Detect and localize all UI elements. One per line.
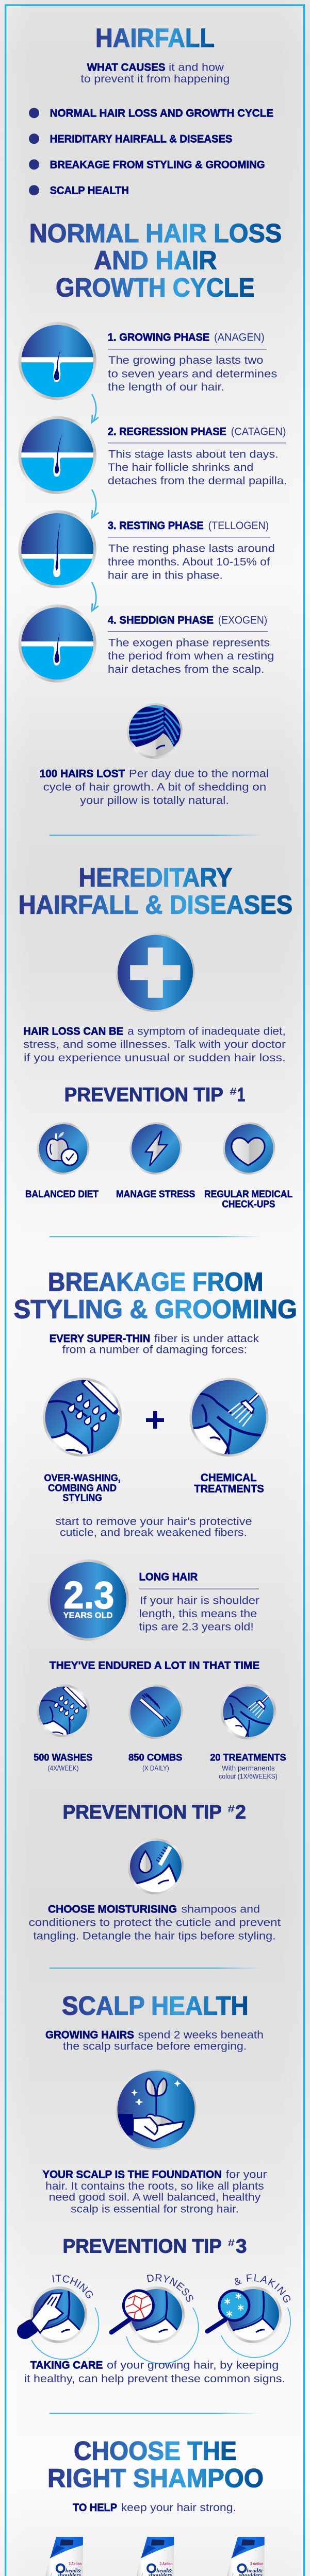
text: taking care xyxy=(24,2360,285,2385)
text: every super-thin xyxy=(50,1333,259,1356)
labels: damage causes: STYLING xyxy=(63,1493,102,1503)
heading: normal hair loss: AND HAIR xyxy=(94,246,217,275)
text: regression phase: 2. REGRESSION PHASE xyxy=(108,426,226,437)
text: long hair: tips are 2.3 years old! xyxy=(139,1621,254,1633)
text: regression phase: This stage lasts about ten days. xyxy=(108,448,279,460)
icon: dryness: DRYNESS xyxy=(146,2274,193,2302)
labels: endured: 20 TREATMENTS xyxy=(210,1752,286,1763)
text: shedding phase: the period from when a resting xyxy=(108,650,274,662)
icon labels: tip 1: CHECK-UPS xyxy=(222,1199,275,1210)
labels: endured xyxy=(34,1752,286,1781)
heading: prevention tip 3: 3 xyxy=(236,2235,247,2257)
text: choose moisturising: conditioners to protect the cuticle and prevent xyxy=(29,1917,281,1928)
text: your scalp: need good soil. A well balanced, healthy xyxy=(49,2192,261,2204)
icon: medical cross xyxy=(116,933,195,1012)
contents list xyxy=(29,108,273,197)
text: resting phase: three months. About 10-15% of xyxy=(108,556,270,568)
text: choose moisturising xyxy=(29,1903,281,1942)
text: your scalp: scalp is essential for strong hair. xyxy=(71,2203,239,2215)
labels: damage causes xyxy=(44,1472,264,1503)
text: choose moisturising: CHOOSE MOISTURISING xyxy=(48,1903,177,1915)
text: start to remove: start to remove your hair's protective xyxy=(55,1516,252,1528)
text: hair loss can be: HAIR LOSS CAN BE xyxy=(23,1025,123,1037)
text: choose moisturising: tangling. Detangle the hair tips before styling. xyxy=(33,1930,276,1942)
text: start to remove xyxy=(55,1516,252,1539)
icon: itching: ITCHING xyxy=(52,2275,93,2299)
text: hair loss can be: if you experience unusual or sudden hair loss. xyxy=(24,1052,286,1064)
text: choose moisturising: shampoos and xyxy=(182,1903,260,1915)
text: every super-thin: EVERY SUPER-THIN xyxy=(50,1333,150,1345)
subtitle: to prevent it from happening xyxy=(80,73,230,85)
text: 100 hairs lost: your pillow is totally natural. xyxy=(80,795,229,807)
heading: scalp health: SCALP HEALTH xyxy=(62,1991,249,2021)
text: hair loss can be xyxy=(23,1025,286,1064)
text: growing phase: (ANAGEN) xyxy=(214,332,265,344)
text: every super-thin: from a number of damaging forces: xyxy=(62,1344,247,1356)
title: HAIRFALL xyxy=(95,23,215,53)
bottle: itchy scalp care xyxy=(44,2537,83,2576)
text: regression phase xyxy=(108,426,287,487)
heading: prevention tip 2: PREVENTION TIP xyxy=(63,1802,222,1823)
heading: breakage xyxy=(14,1267,297,1324)
icon: shedding phase follicle xyxy=(19,604,96,683)
text: growing phase: 1. GROWING PHASE xyxy=(108,332,209,344)
icon: comb xyxy=(128,1685,183,1739)
bottle: itchy scalp care: head& xyxy=(66,2568,81,2574)
labels: damage causes: CHEMICAL xyxy=(201,1472,257,1484)
icon: 20 treatments xyxy=(218,1684,276,1742)
icon: balanced diet apple xyxy=(37,1122,89,1175)
heading: breakage: BREAKAGE FROM xyxy=(48,1267,264,1297)
heading: endured: THEY'VE ENDURED A LOT IN THAT TIME xyxy=(50,1659,259,1671)
icon labels: tip 1: MANAGE STRESS xyxy=(116,1189,195,1200)
heading: hereditary: HEREDITARY xyxy=(78,863,232,892)
icon: chemical treatments xyxy=(184,1378,269,1462)
icon: regression phase follicle xyxy=(19,416,96,494)
bottle: classic clean: head& xyxy=(156,2568,172,2574)
heading: choose the right shampoo: RIGHT SHAMPOO xyxy=(47,2463,264,2493)
icon: plant in hand xyxy=(115,2069,197,2150)
text: growing phase: the length of our hair. xyxy=(108,381,224,393)
text: to help xyxy=(73,2502,236,2514)
bottle: dry scalp care: head& xyxy=(247,2568,263,2574)
contents list: SCALP HEALTH xyxy=(50,185,129,197)
icon labels: tip 1 xyxy=(25,1189,293,1210)
text: your scalp: for your xyxy=(226,2168,267,2180)
text: growing phase: The growing phase lasts two xyxy=(108,354,263,366)
bottle: classic clean: 3 Action xyxy=(160,2562,173,2566)
text: resting phase: The resting phase lasts around xyxy=(108,543,275,555)
arrow xyxy=(92,394,99,422)
labels: damage causes: TREATMENTS xyxy=(194,1483,264,1495)
labels: endured: 850 COMBS xyxy=(128,1752,182,1763)
icon: itching xyxy=(17,2275,99,2360)
icon: moisturising drop and comb xyxy=(128,1838,184,1895)
text: taking care: TAKING CARE xyxy=(30,2360,103,2371)
text: resting phase: (TELLOGEN) xyxy=(208,520,269,532)
text: growing hairs: the scalp surface before emerging. xyxy=(63,2040,247,2052)
icon: manage stress bolt xyxy=(129,1122,182,1175)
bottle: classic clean xyxy=(136,2537,174,2576)
text: to help: keep your hair strong. xyxy=(121,2502,236,2514)
icon: plus sign xyxy=(146,1411,164,1429)
icon: growing phase follicle xyxy=(19,322,96,400)
text: regression phase: detaches from the dermal papilla. xyxy=(108,475,287,487)
heading: normal hair loss xyxy=(29,218,282,302)
heading: prevention tip 1: PREVENTION TIP xyxy=(64,1084,223,1106)
text: your scalp: YOUR SCALP IS THE FOUNDATION xyxy=(42,2168,222,2180)
text: resting phase: hair are in this phase. xyxy=(108,569,223,581)
icon: hair head xyxy=(127,703,183,759)
text: regression phase: (CATAGEN) xyxy=(231,426,286,437)
labels: endured: (4X/WEEK) xyxy=(48,1764,78,1772)
icon: 500 washes xyxy=(34,1682,92,1740)
contents list: BREAKAGE FROM STYLING & GROOMING xyxy=(50,159,265,171)
text: to help: TO HELP xyxy=(73,2502,117,2514)
icon labels: tip 1: BALANCED DIET xyxy=(25,1189,99,1200)
heading: prevention tip 3: # xyxy=(228,2238,235,2249)
text: growing hairs: GROWING HAIRS xyxy=(45,2029,134,2041)
text: growing hairs: spend 2 weeks beneath xyxy=(138,2029,264,2041)
text: growing phase: to seven years and determines xyxy=(108,368,277,380)
text: growing phase xyxy=(108,332,277,393)
icon: flaking: & FLAKING xyxy=(235,2274,291,2303)
bottle: dry scalp care xyxy=(226,2537,265,2576)
text: 100 hairs lost: Per day due to the normal xyxy=(129,768,269,779)
text: hair loss can be: stress, and some illnesses. Talk with your doctor xyxy=(23,1039,286,1050)
text: long hair xyxy=(139,1571,259,1633)
heading: hereditary xyxy=(19,863,292,919)
heading: prevention tip 3: PREVENTION TIP xyxy=(63,2235,222,2257)
arrow xyxy=(92,489,99,518)
heading: prevention tip 2: 2 xyxy=(235,1802,246,1823)
labels: endured: colour (1X/6WEEKS) xyxy=(219,1772,278,1781)
text: 100 hairs lost: cycle of hair growth. A bit of shedding on xyxy=(43,781,266,793)
heading: normal hair loss: GROWTH CYCLE xyxy=(56,273,255,302)
icon: resting phase follicle xyxy=(19,510,96,589)
subtitle: WHAT CAUSES xyxy=(87,62,166,74)
heading: choose the right shampoo xyxy=(47,2436,264,2493)
heading: hereditary: HAIRFALL & DISEASES xyxy=(19,890,292,919)
text: shedding phase: The exogen phase represents xyxy=(108,637,270,649)
labels: damage causes: OVER-WASHING, xyxy=(44,1473,121,1484)
text: hair loss can be: a symptom of inadequate diet, xyxy=(127,1025,286,1037)
text: shedding phase: 4. SHEDDIGN PHASE xyxy=(108,615,214,626)
heading: prevention tip 1: 1 xyxy=(237,1084,245,1106)
text: long hair: If your hair is shoulder xyxy=(140,1595,259,1606)
labels: damage causes: COMBING AND xyxy=(48,1483,117,1494)
labels: endured: 500 WASHES xyxy=(34,1752,92,1763)
icon: dryness xyxy=(109,2274,199,2364)
text: every super-thin: fiber is under attack xyxy=(154,1333,259,1345)
text: shedding phase xyxy=(108,615,274,675)
text: resting phase xyxy=(108,520,275,581)
icon: flaking xyxy=(205,2274,291,2358)
icon: 2.3 years old badge xyxy=(47,1560,129,1641)
icon: 2.3 years old badge: YEARS OLD xyxy=(63,1612,112,1620)
icon: 2.3 years old badge: 2.3 xyxy=(63,1574,115,1617)
icon: over-washing xyxy=(38,1372,127,1462)
text: your scalp: hair. It contains the roots, so like all plants xyxy=(45,2180,264,2192)
labels: endured: (X DAILY) xyxy=(142,1764,169,1772)
arrow xyxy=(92,582,99,611)
text: long hair: LONG HAIR xyxy=(139,1571,198,1583)
heading: prevention tip 2: # xyxy=(228,1804,235,1815)
text: taking care: it healthy, can help prevent these common signs. xyxy=(24,2373,285,2385)
text: 100 hairs lost: 100 HAIRS LOST xyxy=(40,768,125,779)
heading: choose the right shampoo: CHOOSE THE xyxy=(74,2436,237,2465)
contents list: HERIDITARY HAIRFALL & DISEASES xyxy=(50,133,232,145)
text: your scalp xyxy=(42,2168,267,2215)
subtitle: it and how xyxy=(169,62,224,74)
text: long hair: length, this means the xyxy=(139,1608,257,1620)
text: resting phase: 3. RESTING PHASE xyxy=(108,520,204,532)
text: shedding phase: hair detaches from the scalp. xyxy=(108,664,264,675)
heading: normal hair loss: NORMAL HAIR LOSS xyxy=(29,218,282,248)
text: start to remove: cuticle, and break weakened fibers. xyxy=(60,1527,247,1539)
icon labels: tip 1: REGULAR MEDICAL xyxy=(204,1189,293,1200)
bottle: dry scalp care: 3 Action xyxy=(250,2562,263,2566)
text: 100 hairs lost xyxy=(40,768,269,807)
text: shedding phase: (EXOGEN) xyxy=(218,615,267,626)
contents list: NORMAL HAIR LOSS AND GROWTH CYCLE xyxy=(50,108,273,120)
text: taking care: of your growing hair, by keeping xyxy=(107,2360,279,2371)
bottle: itchy scalp care: 3 Action xyxy=(69,2562,81,2566)
heading: breakage: STYLING & GROOMING xyxy=(14,1294,297,1324)
subtitle xyxy=(80,62,230,85)
labels: endured: With permanents xyxy=(222,1764,275,1772)
icon: regular check-ups heart xyxy=(223,1122,275,1175)
text: growing hairs xyxy=(45,2029,264,2052)
text: regression phase: The hair follicle shrinks and xyxy=(108,462,253,473)
heading: prevention tip 1: # xyxy=(230,1087,237,1097)
